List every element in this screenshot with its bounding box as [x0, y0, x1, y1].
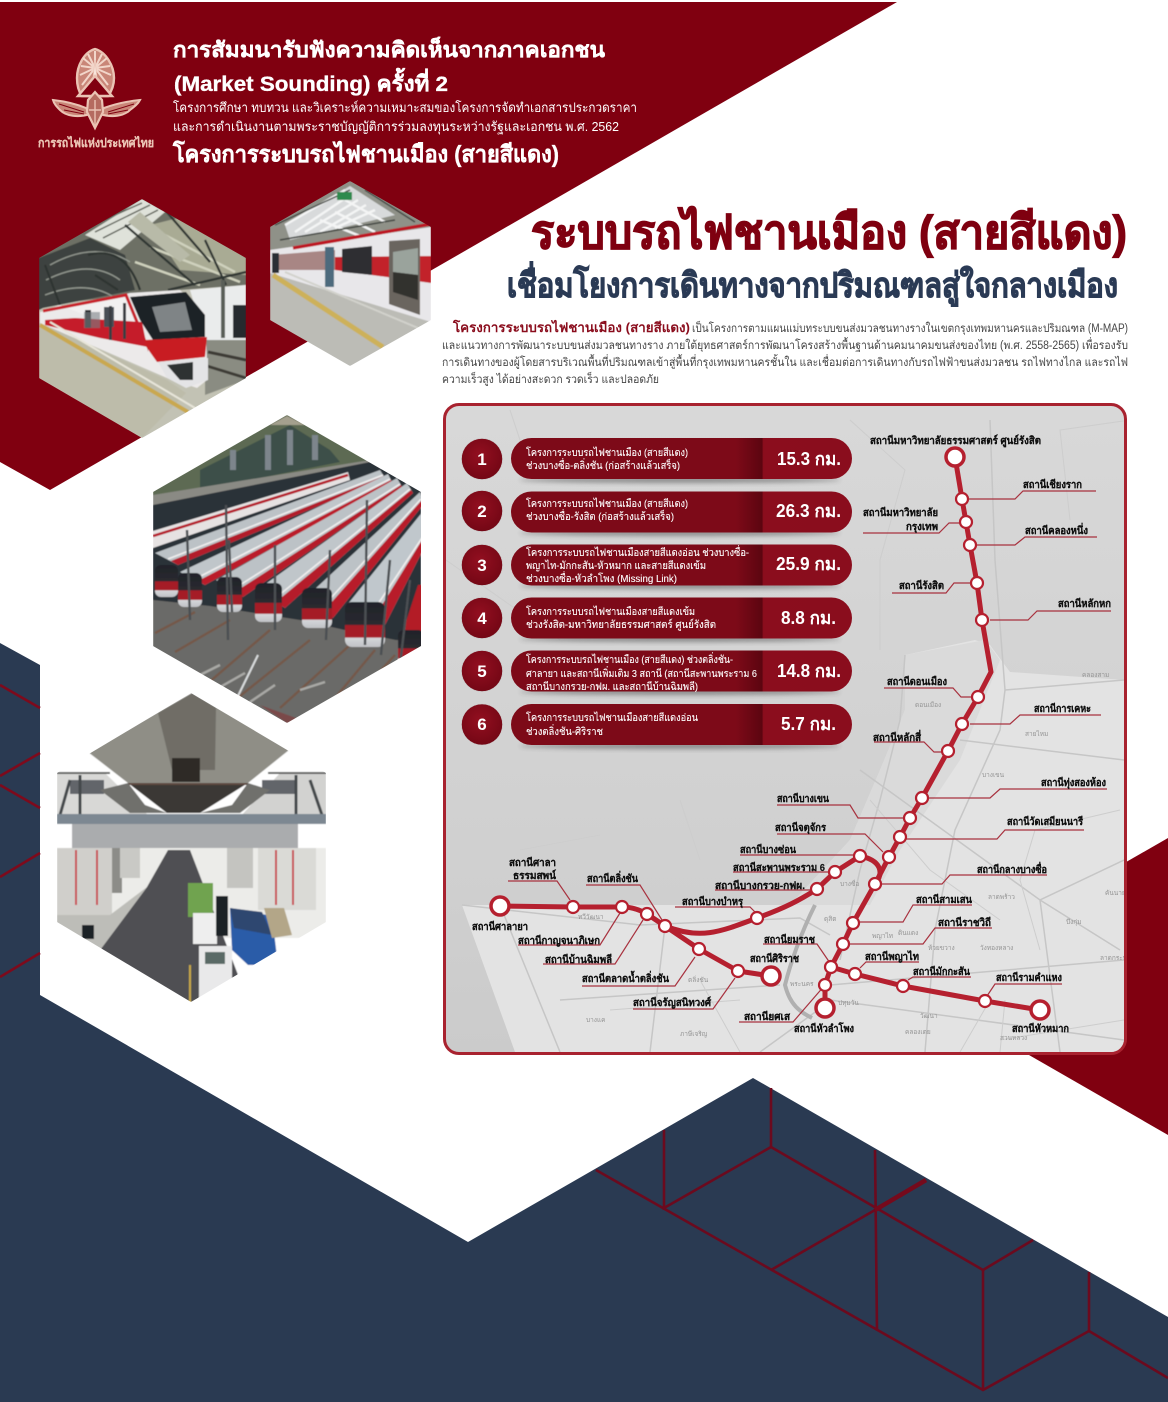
project list row 3: โครงการระบบรถไฟชานเมืองสายสีแดงอ่อน ช่วงบางซื่อ-: [526, 545, 749, 559]
project list row 1: โครงการระบบรถไฟชานเมือง (สายสีแดง): [526, 446, 688, 459]
project list row 1: 1: [477, 450, 487, 469]
red line routes: [500, 457, 1040, 1010]
station labels: สถานีศาลา: [509, 856, 556, 869]
station labels: สถานีกลางบางซื่อ: [977, 861, 1047, 876]
photo: train doors at platform: [270, 181, 431, 366]
station labels: สถานียมราช: [764, 933, 815, 946]
station labels: สถานีมหาวิทยาลัย: [863, 506, 938, 519]
header text block: โครงการศึกษา ทบทวน และวิเคราะห์ความเหมาะสมของโครงการจัดทำเอกสารประกวดราคา: [173, 100, 637, 115]
road name labels: คลองสาม: [1082, 672, 1109, 679]
road name labels: สายไหม: [1025, 730, 1048, 738]
station labels: สถานีตลาดน้ำตลิ่งชัน: [582, 970, 670, 985]
project list row 4: [462, 598, 852, 642]
station labels: สถานีกาญจนาภิเษก: [518, 934, 600, 947]
road name labels: ห้วยขวาง: [928, 944, 955, 952]
station labels: สถานีรังสิต: [899, 579, 944, 592]
station labels: สถานีคลองหนึ่ง: [1025, 522, 1088, 537]
project list row 2: [462, 490, 852, 536]
road name labels: สวนหลวง: [1000, 1035, 1027, 1042]
project list row 4: ช่วงรังสิต-มหาวิทยาลัยธรรมศาสตร์ ศูนย์รังสิต: [526, 618, 716, 631]
panel: route map: [445, 405, 1133, 1053]
station labels: สถานีรามคำแหง: [996, 971, 1062, 984]
project list row 3: 25.9 กม.: [776, 554, 841, 574]
project list row 2: 2: [477, 502, 487, 521]
bottom network line pattern: [596, 1088, 1168, 1390]
road name labels: บึงกุ่ม: [1066, 918, 1082, 926]
road name labels: บางแค: [586, 1017, 606, 1024]
road name labels: ลาดกระบัง: [1100, 954, 1130, 962]
project list row 2: ช่วงบางซื่อ-รังสิต (ก่อสร้างแล้วเสร็จ): [526, 509, 674, 523]
road name labels: ปทุมวัน: [838, 999, 859, 1007]
project list row 3: [462, 544, 852, 589]
photo: road under elevated station: [57, 693, 326, 1002]
header text block: โครงการระบบรถไฟชานเมือง (สายสีแดง): [172, 140, 559, 167]
station labels: [472, 434, 1111, 1035]
photo: depot with parked trains: [153, 415, 424, 723]
road name labels: ดอนเมือง: [915, 701, 941, 709]
project list row 2: โครงการระบบรถไฟชานเมือง (สายสีแดง): [526, 497, 688, 510]
road name labels: คันนายาว: [1105, 889, 1133, 897]
header text block: (Market Sounding) ครั้งที่ 2: [174, 67, 448, 96]
project list row 1: 15.3 กม.: [777, 449, 841, 469]
logo caption: การรถไฟแห่งประเทศไทย: [38, 135, 154, 150]
road name labels: บางซื่อ: [840, 879, 859, 888]
road name labels: ทวีวัฒนา: [578, 913, 604, 921]
station labels: สถานีหลักหก: [1058, 597, 1111, 610]
logo: State Railway of Thailand emblem: [53, 49, 140, 128]
station labels: สถานีบางบำหรุ: [682, 895, 743, 909]
project list row 6: ช่วงตลิ่งชัน-ศิริราช: [526, 724, 603, 738]
project list row 5: [462, 650, 852, 695]
station labels: ธรรมสพน์: [513, 869, 557, 882]
photo: train at station platform: [39, 199, 246, 438]
station labels: สถานีบางเขน: [777, 792, 830, 805]
station labels: สถานีดอนเมือง: [887, 675, 947, 688]
road name labels: คลองเตย: [905, 1029, 931, 1036]
station leader lines: [508, 491, 1111, 1022]
station labels: กรุงเทพ: [906, 521, 938, 534]
road name labels: ภาษีเจริญ: [680, 1030, 708, 1038]
station labels: สถานีสามเสน: [916, 893, 973, 906]
station labels: สถานีจรัญสนิทวงศ์: [633, 996, 711, 1009]
station labels: สถานีตลิ่งชัน: [587, 870, 639, 885]
station labels: สถานีจตุจักร: [775, 821, 826, 835]
project list row 1: ช่วงบางซื่อ-ตลิ่งชัน (ก่อสร้างแล้วเสร็จ): [526, 458, 680, 472]
intro paragraph: โครงการระบบรถไฟชานเมือง (สายสีแดง): [452, 319, 690, 335]
project list row 5: 14.8 กม.: [777, 661, 841, 681]
station labels: สถานีราชวิถี: [938, 916, 991, 929]
project list row 4: 8.8 กม.: [781, 608, 836, 628]
stations: [491, 448, 1049, 1019]
project list row 1: [462, 438, 852, 483]
station labels: สถานีการเคหะ: [1034, 702, 1091, 715]
project list row 6: [462, 704, 852, 749]
road name labels: ลาดพร้าว: [988, 893, 1015, 901]
project list row 6: 5.7 กม.: [781, 714, 836, 734]
project list row 4: 4: [477, 609, 487, 628]
station labels: สถานีมักกะสัน: [913, 965, 971, 978]
project list row 6: 6: [477, 715, 487, 734]
project list row 5: โครงการระบบรถไฟชานเมือง (สายสีแดง) ช่วงตลิ่งชัน-: [526, 652, 733, 666]
project list row 3: พญาไท-มักกะสัน-หัวหมาก และสายสีแดงเข้ม: [526, 559, 706, 572]
intro paragraph: [442, 319, 1128, 386]
project list row 3: ช่วงบางซื่อ-หัวลำโพง (Missing Link): [526, 571, 677, 585]
header text block: และการดำเนินงานตามพระราชบัญญัติการร่วมลงทุนระหว่างรัฐและเอกชน พ.ศ. 2562: [173, 119, 619, 135]
background navy left band and bottom block: [0, 643, 1168, 1402]
project list row 6: โครงการระบบรถไฟชานเมืองสายสีแดงอ่อน: [526, 711, 698, 724]
road name labels: ตลิ่งชัน: [688, 975, 709, 984]
station labels: สถานีเชียงราก: [1023, 478, 1082, 491]
station labels: สถานีบางซ่อน: [740, 843, 797, 856]
station labels: สถานีมหาวิทยาลัยธรรมศาสตร์ ศูนย์รังสิต: [870, 434, 1041, 448]
right red triangle behind map: [1029, 838, 1168, 1135]
project list row 5: สถานีบางกรวย-กฟผ. และสถานีบ้านฉิมพลี): [526, 680, 698, 693]
project list row 5: ศาลายา และสถานีเพิ่มเติม 3 สถานี (สถานีสะพานพระราม 6: [526, 666, 757, 680]
station labels: สถานีบ้านฉิมพลี: [545, 953, 612, 966]
station labels: สถานีศาลายา: [472, 920, 528, 933]
header red diagonal shape: [0, 2, 897, 490]
road name labels: พระนคร: [790, 981, 814, 988]
station labels: สถานีทุ่งสองห้อง: [1041, 776, 1106, 790]
map background: [446, 406, 1133, 1052]
intro paragraph: ความเร็วสูง ได้อย่างสะดวก รวดเร็ว และปลอดภัย: [442, 371, 659, 386]
station labels: สถานีวัดเสมียนนารี: [1007, 815, 1083, 828]
project list row 4: โครงการระบบรถไฟชานเมืองสายสีแดงเข้ม: [526, 605, 695, 618]
road name labels: ดินแดง: [898, 929, 918, 937]
road name labels: ดุสิต: [824, 915, 836, 923]
road name labels: พญาไท: [872, 932, 893, 940]
project list row 5: 5: [477, 662, 487, 681]
header text block: การสัมมนารับฟังความคิดเห็นจากภาคเอกชน: [173, 35, 605, 62]
main title: ระบบรถไฟชานเมือง (สายสีแดง): [531, 206, 1127, 258]
project list row 3: 3: [477, 556, 487, 575]
station labels: สถานียศเส: [744, 1010, 791, 1023]
road name labels: บางเขน: [982, 772, 1005, 779]
road name labels: วัฒนา: [920, 1012, 938, 1020]
road name labels: [578, 672, 1133, 1042]
project list row 2: 26.3 กม.: [776, 501, 841, 521]
station labels: สถานีบางกรวย-กฟผ.: [715, 879, 805, 892]
road name labels: วังทองหลาง: [980, 944, 1013, 952]
station labels: สถานีหลักสี่: [873, 729, 922, 744]
header text block: [172, 35, 637, 167]
station labels: สถานีหัวลำโพง: [794, 1022, 854, 1035]
station labels: สถานีพญาไท: [865, 950, 919, 963]
station labels: สถานีสะพานพระราม 6: [733, 861, 825, 874]
station labels: สถานีหัวหมาก: [1012, 1022, 1069, 1035]
station labels: สถานีศิริราช: [750, 952, 799, 965]
